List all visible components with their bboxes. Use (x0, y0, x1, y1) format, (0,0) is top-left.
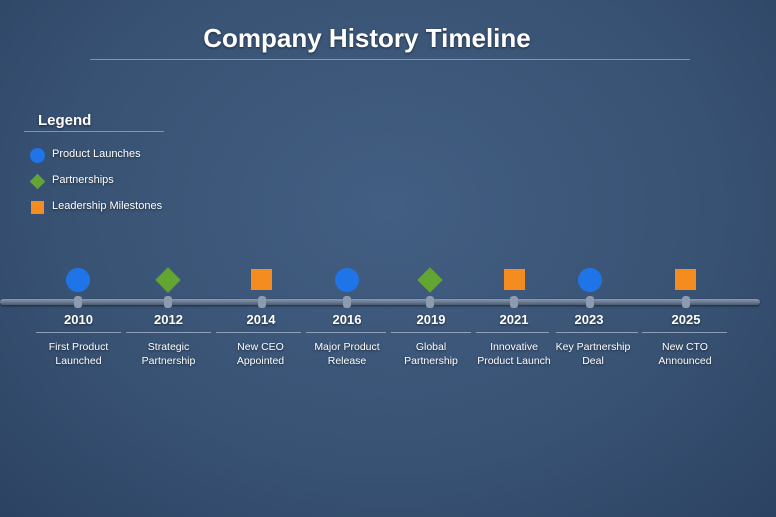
timeline events (36, 267, 727, 367)
event 2014: New CEO (237, 341, 284, 353)
event 2023 (556, 268, 638, 367)
event 2025 (642, 269, 727, 367)
event 2023: Key Partnership (556, 341, 630, 353)
legend (24, 112, 164, 214)
event 2021 (476, 269, 551, 367)
event 2019 (391, 267, 471, 367)
event 2010: 2010 (64, 312, 93, 327)
event 2016: Release (328, 355, 366, 367)
event 2012: Strategic (148, 341, 189, 353)
event 2012: 2012 (154, 312, 183, 327)
event 2014 (216, 269, 301, 367)
title: Company History Timeline (203, 23, 531, 53)
event 2012 (126, 267, 211, 367)
event 2016: 2016 (333, 312, 361, 327)
legend item: product launches: Product Launches (52, 148, 141, 160)
event 2025: Announced (658, 355, 712, 367)
event 2025: 2025 (672, 312, 700, 327)
event 2023: Deal (582, 355, 604, 367)
timeline axis (0, 299, 760, 305)
event 2025: New CTO (662, 341, 708, 353)
legend item: leadership milestones: Leadership Milestones (52, 200, 162, 212)
event 2010: First Product (49, 341, 108, 353)
event 2021: 2021 (500, 312, 528, 327)
event 2019: Partnership (404, 355, 458, 367)
legend item: partnerships: Partnerships (52, 174, 114, 186)
event 2023: 2023 (575, 312, 603, 327)
event 2021: Product Launch (477, 355, 551, 367)
event 2012: Partnership (142, 355, 195, 367)
legend heading: Legend (38, 112, 91, 129)
event 2021: Innovative (490, 341, 538, 353)
event 2014: 2014 (247, 312, 275, 327)
event 2010 (36, 268, 121, 367)
event 2016: Major Product (314, 341, 380, 353)
legend item: product launches (30, 148, 141, 163)
event 2014: Appointed (237, 355, 284, 367)
event 2010: Launched (55, 355, 102, 367)
event 2019: 2019 (417, 312, 445, 327)
event 2019: Global (416, 341, 446, 353)
legend item: partnerships (30, 174, 114, 190)
event 2016 (306, 268, 386, 367)
